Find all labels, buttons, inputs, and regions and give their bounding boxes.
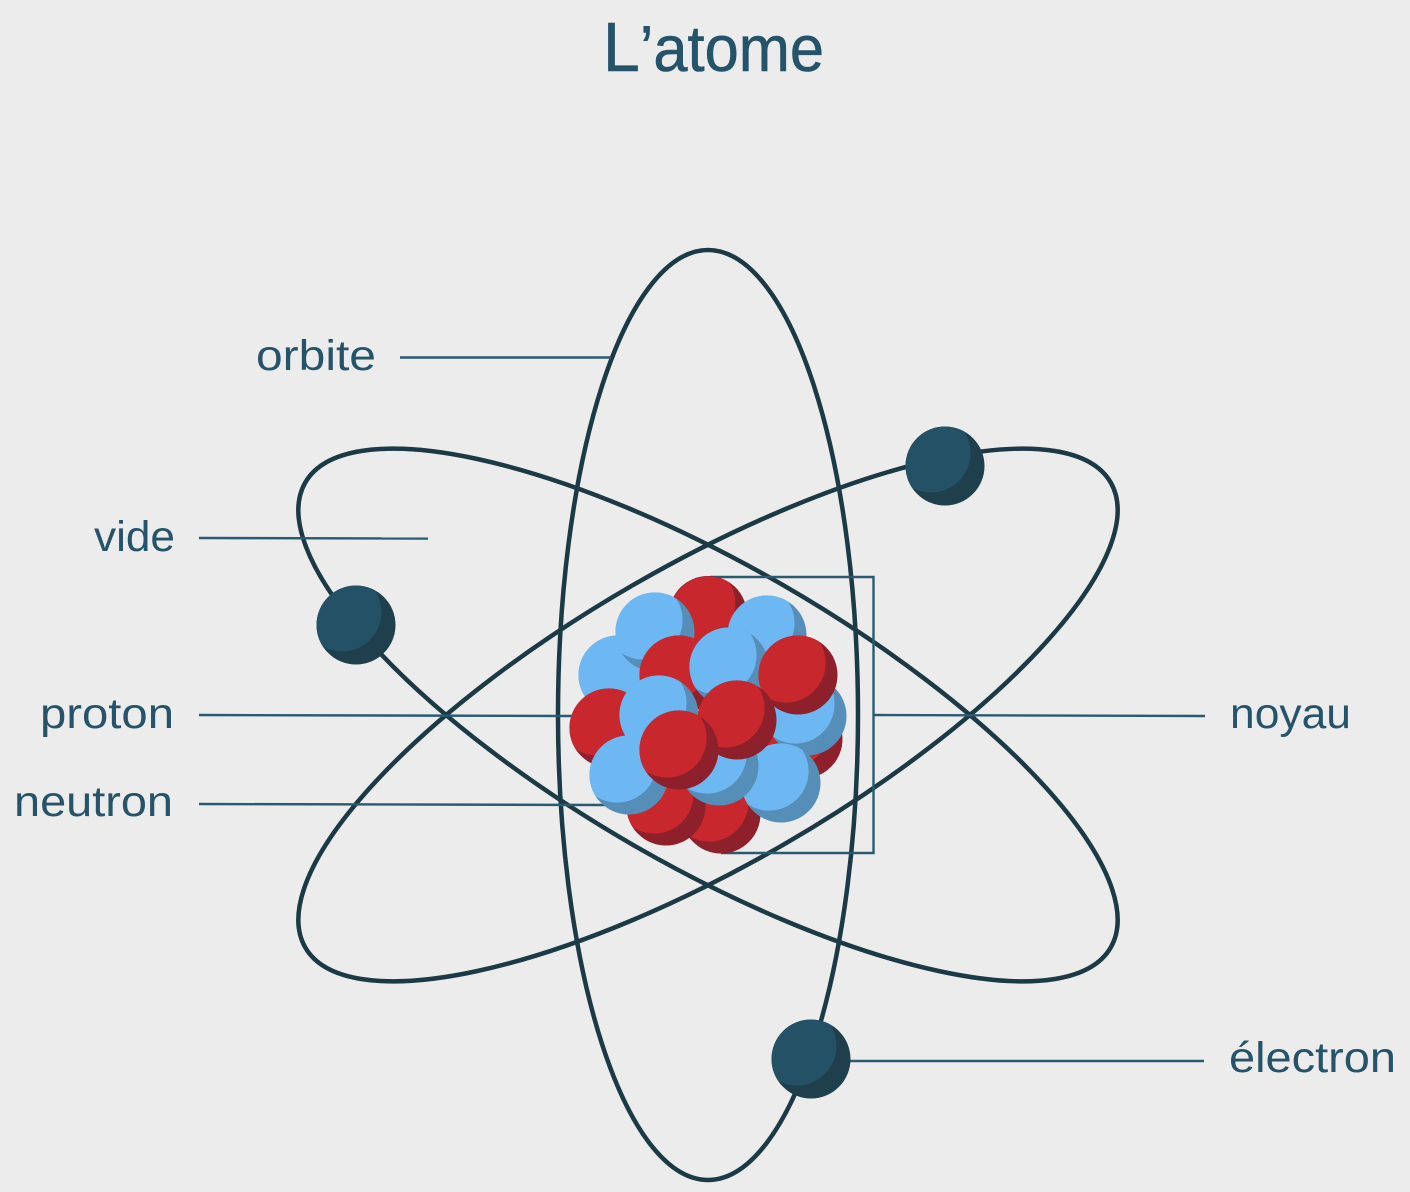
- neutron lower centre: [679, 726, 758, 806]
- label: électron: électron: [1229, 1034, 1396, 1082]
- neutron middle left: [619, 675, 698, 754]
- leader line: orbite: [400, 356, 611, 359]
- proton bottom: [681, 774, 760, 854]
- leader line: proton: [199, 715, 572, 716]
- leader line: vide: [199, 537, 428, 540]
- leader line: noyau: [874, 715, 1205, 716]
- electron left: [316, 586, 396, 664]
- label: vide: vide: [94, 513, 175, 561]
- neutron centre top: [689, 627, 768, 706]
- electron top right: [906, 426, 984, 506]
- leader line: électron: [848, 1060, 1204, 1062]
- label: neutron: neutron: [14, 778, 173, 826]
- proton left: [569, 688, 648, 768]
- proton right: [758, 635, 838, 714]
- proton front: [639, 710, 718, 790]
- proton top: [669, 576, 747, 654]
- bracket around nucleus: [710, 577, 874, 853]
- proton lower right: [763, 699, 842, 778]
- electron bottom: [772, 1020, 850, 1098]
- nucleus: [569, 576, 846, 854]
- leader line: neutron: [199, 804, 606, 805]
- neutron lower left: [589, 735, 668, 814]
- neutron lower right: [741, 743, 820, 822]
- title: L’atome: [603, 8, 824, 86]
- proton centre: [697, 680, 776, 760]
- neutron right: [767, 676, 846, 756]
- neutron top right: [727, 595, 806, 674]
- proton bottom left: [626, 766, 706, 846]
- neutron top left: [615, 592, 694, 672]
- proton middle: [639, 635, 718, 714]
- label: orbite: orbite: [256, 332, 376, 380]
- label: noyau: noyau: [1230, 690, 1351, 738]
- orbits: [230, 250, 1186, 1180]
- label: proton: proton: [40, 690, 174, 738]
- neutron left: [578, 635, 658, 714]
